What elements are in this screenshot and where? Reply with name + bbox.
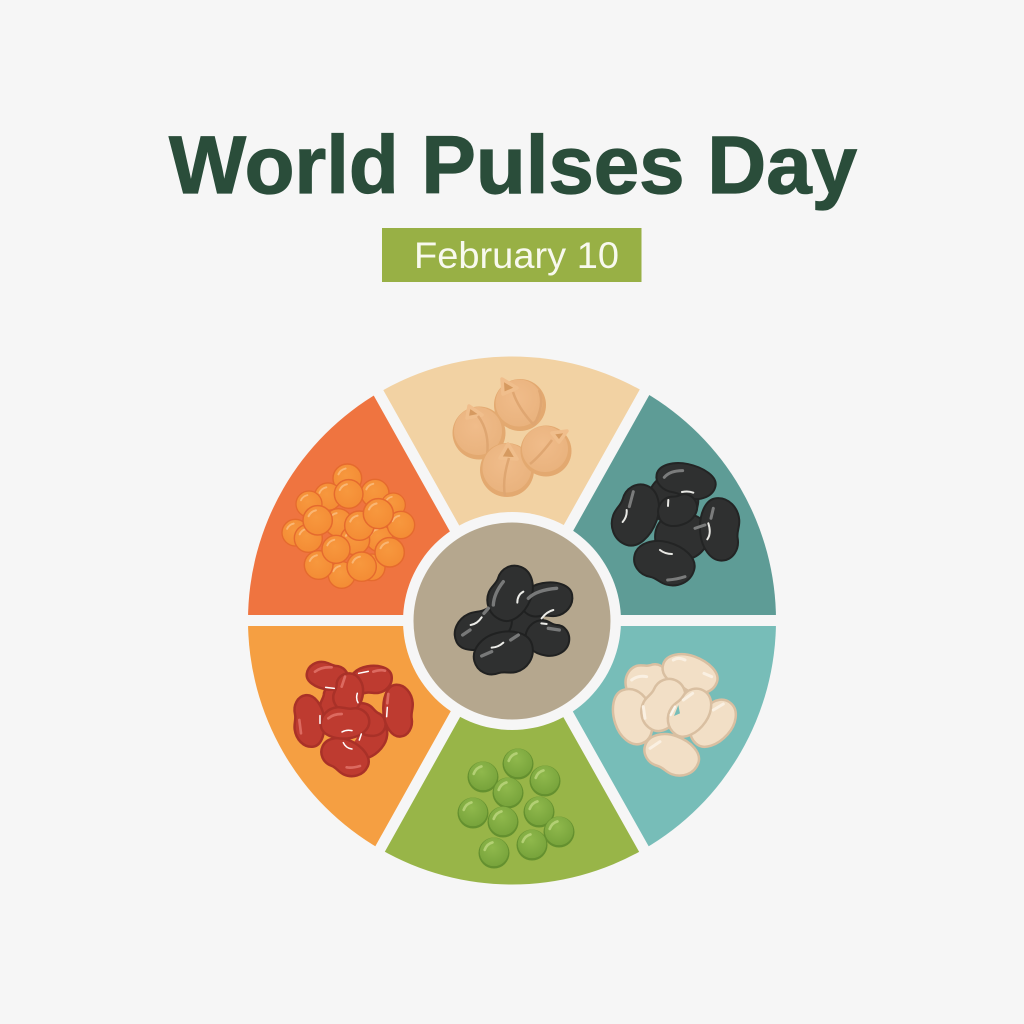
sector: red lentils background (248, 392, 512, 620)
pulses wheel (240, 357, 784, 884)
icon: black beans (605, 458, 743, 591)
icon: green peas (458, 748, 574, 868)
icon: red lentils (282, 464, 415, 588)
date badge (382, 228, 642, 282)
icon: kidney beans (290, 660, 416, 782)
center circle (414, 522, 610, 720)
date badge: February 10 (414, 234, 619, 276)
icon: chickpeas (452, 379, 572, 497)
chickpea left (452, 406, 506, 460)
sector: kidney beans background (248, 620, 512, 849)
sector: black beans background (512, 392, 776, 620)
sector: chickpeas background (380, 357, 644, 620)
title: World Pulses Day (169, 120, 857, 211)
icon: white beans (606, 647, 745, 781)
sector: white beans background (512, 620, 776, 849)
chickpea bottom (480, 443, 534, 497)
chickpea top (494, 379, 546, 431)
icon: center black beans (448, 559, 575, 682)
sector: green peas background (380, 620, 644, 884)
chickpea right (520, 426, 572, 476)
